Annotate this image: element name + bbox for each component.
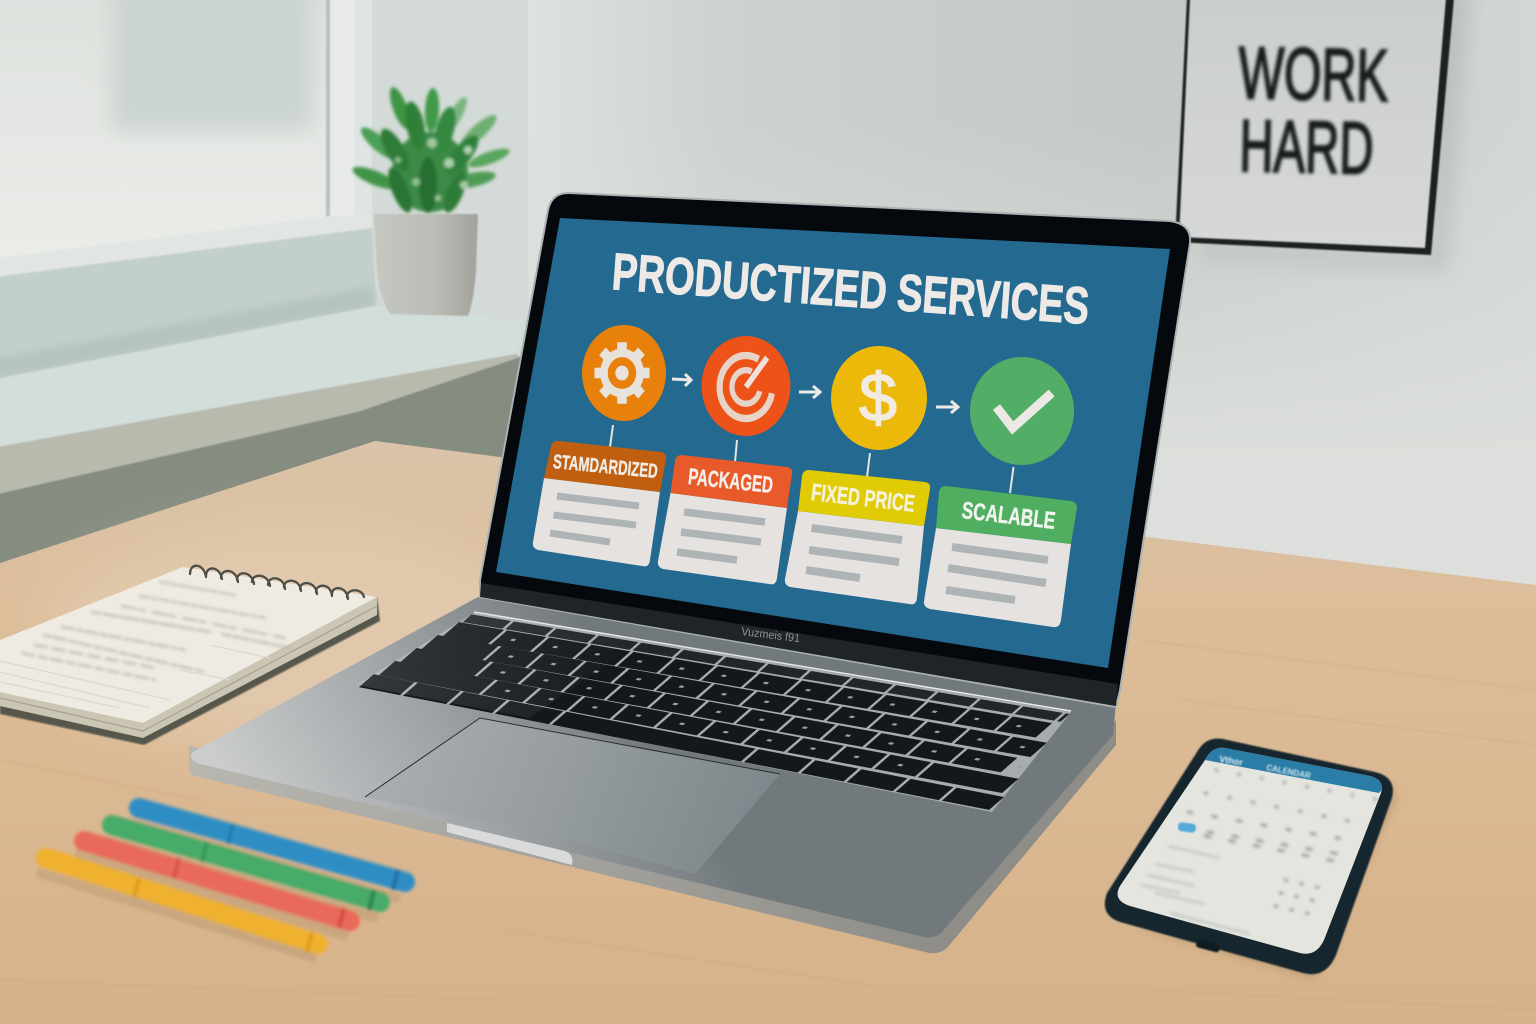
phone body — [1105, 739, 1393, 974]
wooden desk — [0, 441, 1536, 1024]
green pen — [112, 825, 380, 910]
smartphone with calendar — [1100, 739, 1400, 980]
red pen — [84, 841, 350, 928]
key well highlight — [474, 612, 1071, 711]
connector — [735, 440, 737, 462]
step: packaged — [658, 336, 792, 584]
laptop — [189, 193, 1190, 953]
brand label: Vuzmeis f91 — [741, 626, 801, 645]
trackpad — [365, 718, 780, 874]
card: STAMDARDIZED — [552, 451, 659, 483]
screen infographic — [496, 218, 1170, 668]
plant pot — [374, 214, 478, 316]
hinge chin — [480, 583, 1118, 706]
pen shadows — [37, 822, 400, 958]
notebook page block — [0, 597, 380, 745]
card: SCALABLE — [960, 497, 1057, 535]
window and sill — [0, 0, 535, 580]
selected date pill — [1177, 822, 1196, 833]
card — [658, 455, 792, 584]
laptop lid and bezel — [480, 193, 1190, 707]
laptop base top — [191, 597, 1116, 938]
icon: target — [702, 336, 790, 436]
qwerty row — [430, 642, 1039, 750]
card — [533, 441, 666, 566]
card — [785, 470, 930, 604]
left key sheen — [356, 613, 640, 718]
poster frame — [1175, 0, 1454, 255]
phone date title: CALENDAR — [1266, 763, 1312, 781]
phone charging port — [1195, 939, 1221, 953]
front notch — [447, 823, 572, 865]
card: FIXED PRICE — [810, 479, 916, 518]
step: scalable — [924, 357, 1077, 627]
poster paper — [1179, 0, 1446, 248]
number row — [451, 629, 1053, 732]
potted plant — [350, 85, 512, 316]
phone shadow — [1125, 780, 1396, 980]
poster words — [1238, 31, 1389, 190]
spiral notebook — [0, 566, 380, 745]
phone notch — [1268, 756, 1269, 757]
yellow pen — [46, 858, 318, 952]
event list lines — [1140, 846, 1250, 934]
phone screen — [1118, 748, 1382, 954]
icon: gear — [582, 325, 666, 421]
function row — [467, 618, 1065, 718]
connector — [867, 453, 870, 477]
card: PACKAGED — [687, 463, 774, 498]
plant leaves — [350, 85, 512, 215]
calendar grid — [1188, 770, 1380, 915]
shift row — [387, 668, 1010, 786]
screen background — [496, 218, 1170, 668]
icon: check mark — [970, 357, 1074, 465]
arrow 2 — [799, 386, 820, 398]
icon: dollar — [831, 346, 927, 450]
card — [924, 486, 1077, 627]
keyboard — [356, 612, 1071, 812]
step: fixed price — [785, 346, 930, 604]
key bed — [356, 613, 1071, 812]
coloured pens — [37, 808, 405, 958]
notebook handwriting — [22, 582, 290, 680]
arrow 1 — [672, 374, 691, 386]
notebook cover page — [0, 567, 377, 723]
notebook spiral rings — [190, 566, 364, 599]
poster shadow — [1200, 0, 1470, 270]
icon: dollar: $ — [859, 360, 897, 436]
laptop base front edge — [189, 720, 1116, 953]
bottom row with space bar — [366, 681, 996, 803]
phone header bar — [1205, 748, 1382, 793]
poster words: HARD — [1239, 104, 1374, 190]
home row — [408, 655, 1024, 768]
phone header text: Vthor — [1219, 754, 1244, 768]
title: PRODUCTIZED SERVICES — [610, 243, 1091, 336]
blue pen — [139, 808, 405, 890]
connector — [610, 425, 613, 447]
poster words: WORK — [1238, 31, 1389, 117]
step: standardized — [533, 325, 666, 566]
connector — [1010, 467, 1014, 493]
poster: work hard — [1175, 0, 1470, 270]
arrow 3 — [936, 401, 958, 413]
